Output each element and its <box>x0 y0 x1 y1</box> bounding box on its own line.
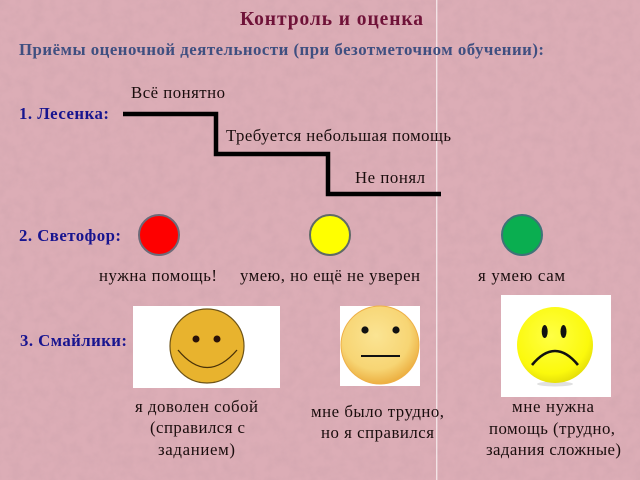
caption: sad smiley <box>486 397 621 459</box>
icon: red light <box>139 215 179 255</box>
subtitle: Приёмы оценочной деятельности (при безотметочном обучении): <box>19 40 544 59</box>
caption: red: нужна помощь! <box>99 266 217 285</box>
heading: staircase: 1. Лесенка: <box>19 104 109 123</box>
caption: sad smiley: помощь (трудно, <box>489 419 615 438</box>
caption: yellow: умею, но ещё не уверен <box>240 266 420 285</box>
caption: happy smiley: (справился с <box>150 418 245 437</box>
caption: neutral smiley: но я справился <box>321 423 434 442</box>
label: did not understand: Не понял <box>355 168 425 187</box>
title: Контроль и оценка <box>240 9 423 30</box>
caption: happy smiley: я доволен собой <box>135 397 258 416</box>
caption: sad smiley: задания сложные) <box>486 440 621 459</box>
caption: happy smiley: заданием) <box>158 440 235 459</box>
label: little help needed: Требуется небольшая помощь <box>226 126 451 145</box>
icon: sad smiley <box>501 295 611 397</box>
icon: yellow light <box>310 215 350 255</box>
section: smileys <box>20 295 621 459</box>
caption: happy smiley <box>135 397 258 459</box>
icon: neutral smiley <box>340 306 420 386</box>
section: staircase <box>19 83 451 194</box>
caption: neutral smiley: мне было трудно, <box>311 402 444 421</box>
caption: sad smiley: мне нужна <box>512 397 595 416</box>
caption: neutral smiley <box>311 402 444 442</box>
heading: smileys: 3. Смайлики: <box>20 331 127 350</box>
icon: green light <box>502 215 542 255</box>
section: traffic light <box>19 215 565 285</box>
heading: traffic light: 2. Светофор: <box>19 226 121 245</box>
label: all clear: Всё понятно <box>131 83 225 102</box>
caption: green: я умею сам <box>478 266 565 285</box>
icon: happy smiley <box>133 306 280 388</box>
staircase line <box>123 114 441 194</box>
